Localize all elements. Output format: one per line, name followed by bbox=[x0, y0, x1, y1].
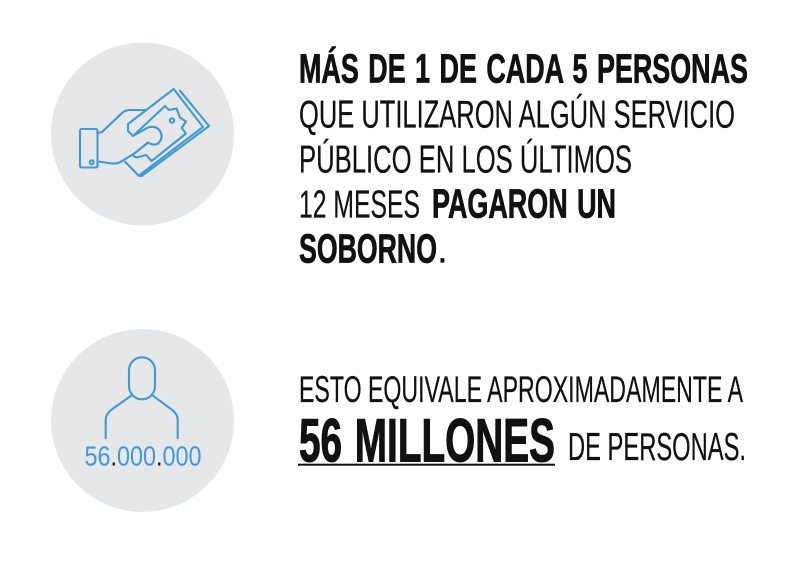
icon background circle bbox=[51, 329, 234, 512]
statistic text bbox=[299, 46, 748, 272]
number 56.000.000: 56.000.000 bbox=[84, 441, 202, 472]
highlighted figure: 56 MILLONES bbox=[299, 406, 555, 474]
line 5 bold: SOBORNO bbox=[299, 226, 437, 272]
icon: person with number bbox=[51, 329, 234, 512]
panel: total people bbox=[51, 329, 746, 512]
person head bbox=[129, 357, 155, 399]
hand bbox=[98, 89, 174, 164]
line 4 bold: PAGARON UN bbox=[432, 180, 616, 226]
icon: hand holding money bbox=[51, 42, 234, 226]
underline bbox=[298, 464, 555, 466]
banknote centre dot bbox=[170, 118, 174, 123]
shirt cuff bbox=[80, 129, 98, 168]
panel: bribery statistic bbox=[51, 42, 748, 272]
person shoulders bbox=[106, 396, 178, 438]
icon background circle bbox=[51, 42, 234, 226]
equivalence text bbox=[298, 369, 746, 474]
banknotes bbox=[125, 89, 209, 176]
line 4 regular: 12 MESES bbox=[299, 184, 420, 226]
line 5 period: . bbox=[437, 228, 448, 272]
